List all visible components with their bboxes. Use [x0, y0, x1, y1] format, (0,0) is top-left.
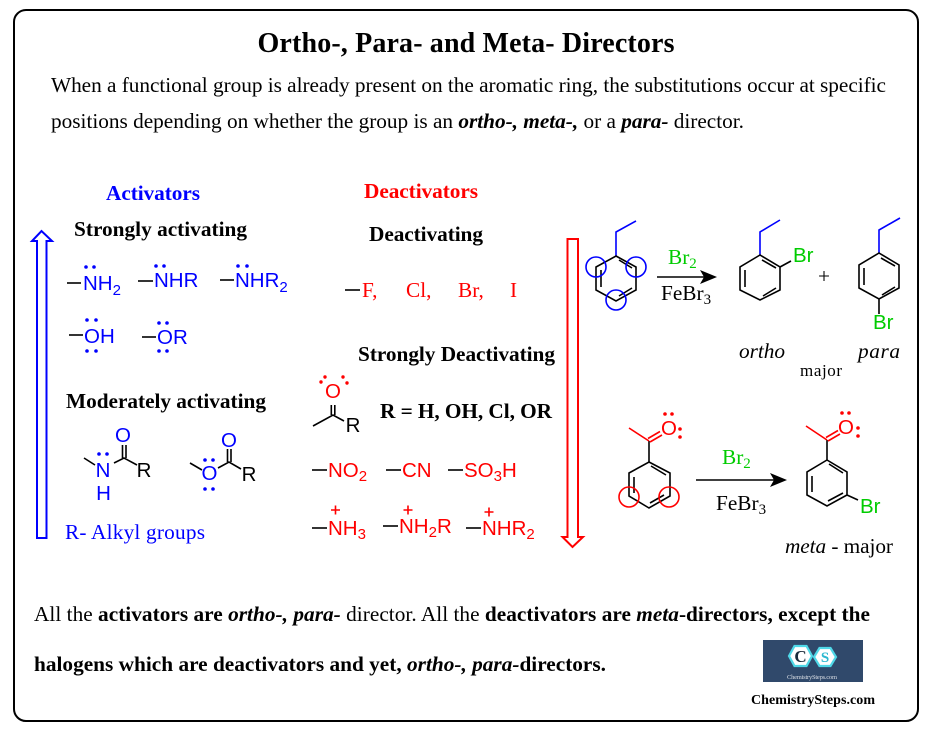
group: amide — [84, 424, 151, 505]
summary text: halogens which are deactivators and yet, ortho-, para-directors. — [34, 652, 606, 676]
group: ester: O — [202, 462, 217, 485]
group: NH2: 2 — [113, 282, 121, 299]
intro text: positions depending on whether the group is an ortho-, meta-, or a para- director. — [51, 109, 744, 133]
intro text — [51, 73, 886, 133]
reagent: Br2: Br — [722, 445, 743, 469]
molecule: para product — [859, 218, 900, 334]
group: halogens: Cl, — [406, 278, 431, 302]
group: NH2: NH — [83, 272, 113, 295]
molecule: ethylbenzene — [586, 221, 646, 310]
molecule: meta product — [806, 411, 881, 518]
reagent: FeBr3: 3 — [704, 292, 711, 308]
reagent: FeBr3: FeBr — [716, 491, 759, 515]
intro text: When a functional group is already present on the aromatic ring, the substitutions occur at specific — [51, 73, 886, 97]
group: NH3+: NH — [328, 517, 358, 540]
group: NO2 — [312, 459, 367, 485]
group: NH2R+: NH — [399, 515, 429, 538]
reagent: Br2: Br — [668, 245, 689, 269]
group: OR — [142, 321, 188, 353]
molecule: ortho product — [740, 220, 814, 300]
panel: activators — [32, 181, 288, 544]
molecule: para product: Br — [873, 311, 894, 334]
logo: ChemistrySteps: S — [821, 650, 829, 666]
group: NH2R+: 2 — [429, 524, 437, 541]
group: NHR2: NHR — [235, 269, 279, 292]
arrow: reaction 2 — [696, 479, 776, 481]
reagent: Br2: 2 — [689, 256, 697, 272]
group: ester — [190, 429, 256, 491]
heading: deactivating: Deactivating — [369, 222, 483, 246]
reagent: FeBr3: FeBr — [661, 281, 704, 305]
group: NHR2+: 2 — [526, 526, 535, 543]
group: NHR2: 2 — [279, 279, 288, 296]
group: NH3+: 3 — [358, 526, 366, 543]
group: SO3H — [448, 459, 517, 485]
group: amide: N — [96, 459, 110, 482]
title: Ortho-, Para- and Meta- Directors — [258, 28, 675, 59]
label: ortho: ortho — [739, 339, 785, 363]
group: NHR2+: NHR — [482, 517, 526, 540]
summary text: All the activators are ortho-, para- director. All the deactivators are meta-directors, except the — [34, 602, 870, 626]
group: NHR2 — [220, 264, 288, 296]
group: carbonyl: O — [325, 380, 341, 403]
group: OH: OH — [84, 325, 115, 348]
group: NH2R+ — [383, 506, 452, 541]
arrow: increasing deactivation — [562, 239, 583, 547]
group: OR: OR — [157, 326, 188, 349]
molecule: acetophenone: O — [661, 417, 677, 440]
group: halogens — [345, 278, 517, 302]
panel: meta reaction — [619, 411, 893, 558]
logo caption: ChemistrySteps.com — [751, 693, 875, 708]
group: halogens: Br, — [458, 278, 484, 302]
group: CN — [386, 459, 432, 482]
logo: ChemistrySteps: ChemistrySteps.com — [787, 674, 837, 681]
group: halogens: I — [510, 278, 517, 302]
group: halogens: F, — [362, 278, 377, 302]
plus sign: + — [818, 264, 830, 288]
group: SO3H: H — [502, 459, 517, 482]
molecule: acetophenone — [619, 412, 682, 508]
group: NHR2+ — [466, 508, 535, 543]
group: NHR: NHR — [154, 269, 198, 292]
arrow: reaction 1 — [657, 276, 706, 278]
group: NH2R+: R — [437, 515, 452, 538]
heading: moderately activating: Moderately activating — [66, 389, 266, 413]
heading: strongly activating: Strongly activating — [74, 217, 247, 241]
group: amide: R — [137, 459, 151, 482]
reagent: Br2: 2 — [743, 456, 751, 472]
label: R substituents: R = H, OH, Cl, OR — [380, 399, 553, 423]
group: carbonyl — [313, 375, 360, 437]
arrowhead: reaction 1 — [700, 270, 717, 284]
group: ester: R — [242, 463, 256, 486]
molecule: ortho product: Br — [793, 244, 814, 267]
logo: ChemistrySteps — [763, 640, 863, 682]
group: OH — [69, 318, 115, 353]
summary text — [34, 602, 870, 676]
molecule: meta product: O — [838, 416, 854, 439]
group: SO3H: 3 — [494, 468, 502, 485]
label: para: para — [856, 339, 900, 363]
arrowhead: reaction 2 — [770, 473, 787, 487]
panel: ortho-para reaction — [586, 218, 900, 380]
group: carbonyl: R — [346, 414, 360, 437]
label: R alkyl groups: R- Alkyl groups — [65, 520, 205, 544]
panel: deactivators — [312, 179, 555, 543]
group: amide: O — [115, 424, 131, 447]
group: ester: O — [221, 429, 237, 452]
label: major: major — [800, 361, 842, 380]
group: NO2: NO — [328, 459, 359, 482]
group: SO3H: SO — [464, 459, 494, 482]
heading: strongly deactivating: Strongly Deactivating — [358, 342, 555, 366]
heading: deactivators: Deactivators — [364, 179, 478, 203]
molecule: meta product: Br — [860, 495, 881, 518]
group: amide: H — [96, 482, 111, 505]
label: meta major: meta - major — [785, 534, 893, 558]
group: CN: CN — [402, 459, 432, 482]
reagent: FeBr3: 3 — [759, 502, 766, 518]
group: NH3+ — [312, 506, 366, 543]
arrow: increasing activation — [32, 231, 52, 538]
heading: activators: Activators — [106, 181, 200, 205]
logo: ChemistrySteps: C — [794, 647, 807, 666]
group: NH2 — [67, 265, 121, 299]
group: NO2: 2 — [359, 468, 367, 485]
group: NHR — [138, 264, 198, 292]
